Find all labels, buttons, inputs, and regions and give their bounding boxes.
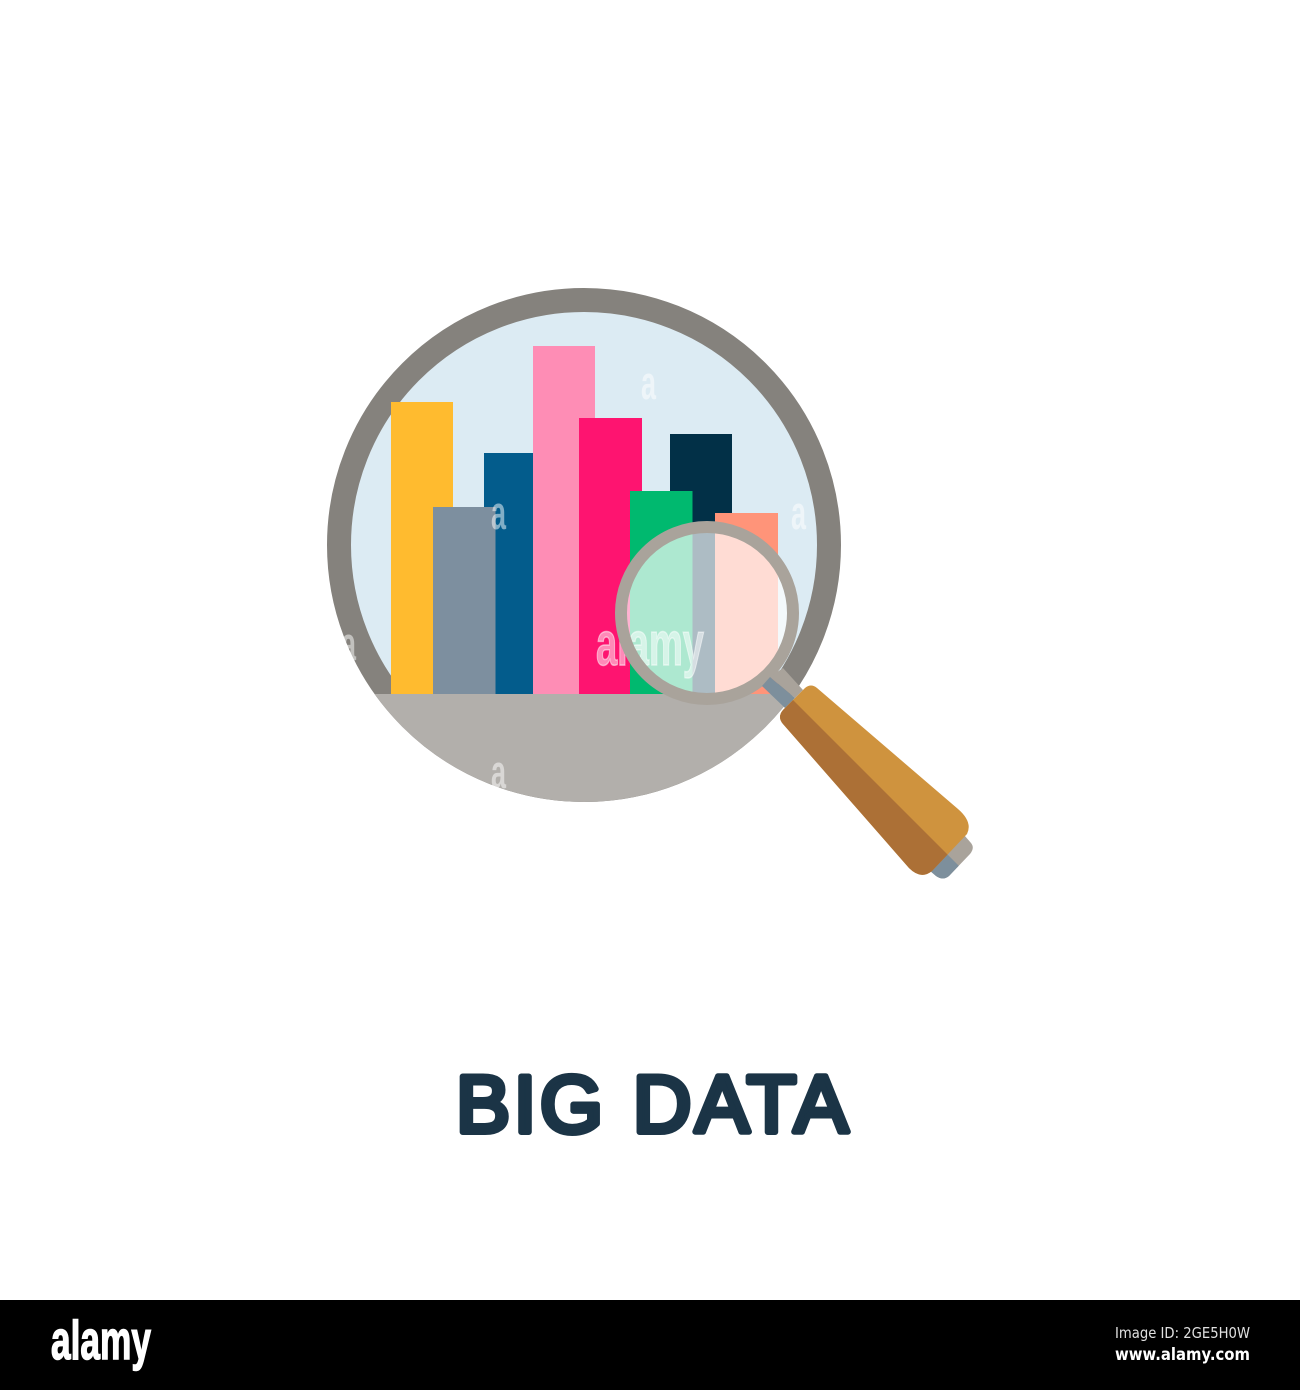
wooden handle xyxy=(780,686,969,875)
title: BIG DATA xyxy=(456,1060,848,1150)
watermark letters: a xyxy=(641,356,656,409)
website: www.alamy.com xyxy=(1115,1345,1250,1365)
handle end cap xyxy=(931,836,973,878)
floor xyxy=(375,694,792,802)
watermark letters: a xyxy=(791,486,806,539)
watermark letters: a xyxy=(341,617,356,670)
image id: Image ID: 2GE5H0W xyxy=(1115,1324,1250,1342)
bar chart xyxy=(391,346,778,694)
watermark letters: alamy xyxy=(596,610,704,679)
footer logo: alamy xyxy=(51,1309,151,1371)
lens glass xyxy=(626,532,788,694)
icon: big data chart in magnifying glass xyxy=(320,300,985,900)
watermark letters: a xyxy=(491,745,506,798)
lens ring xyxy=(621,527,793,699)
watermark letters xyxy=(341,356,806,798)
handle neck xyxy=(762,668,803,708)
large circle ring xyxy=(339,300,829,790)
footer bar xyxy=(0,1300,1300,1390)
watermark letters: a xyxy=(491,486,506,539)
infographic canvas xyxy=(0,288,1300,1390)
